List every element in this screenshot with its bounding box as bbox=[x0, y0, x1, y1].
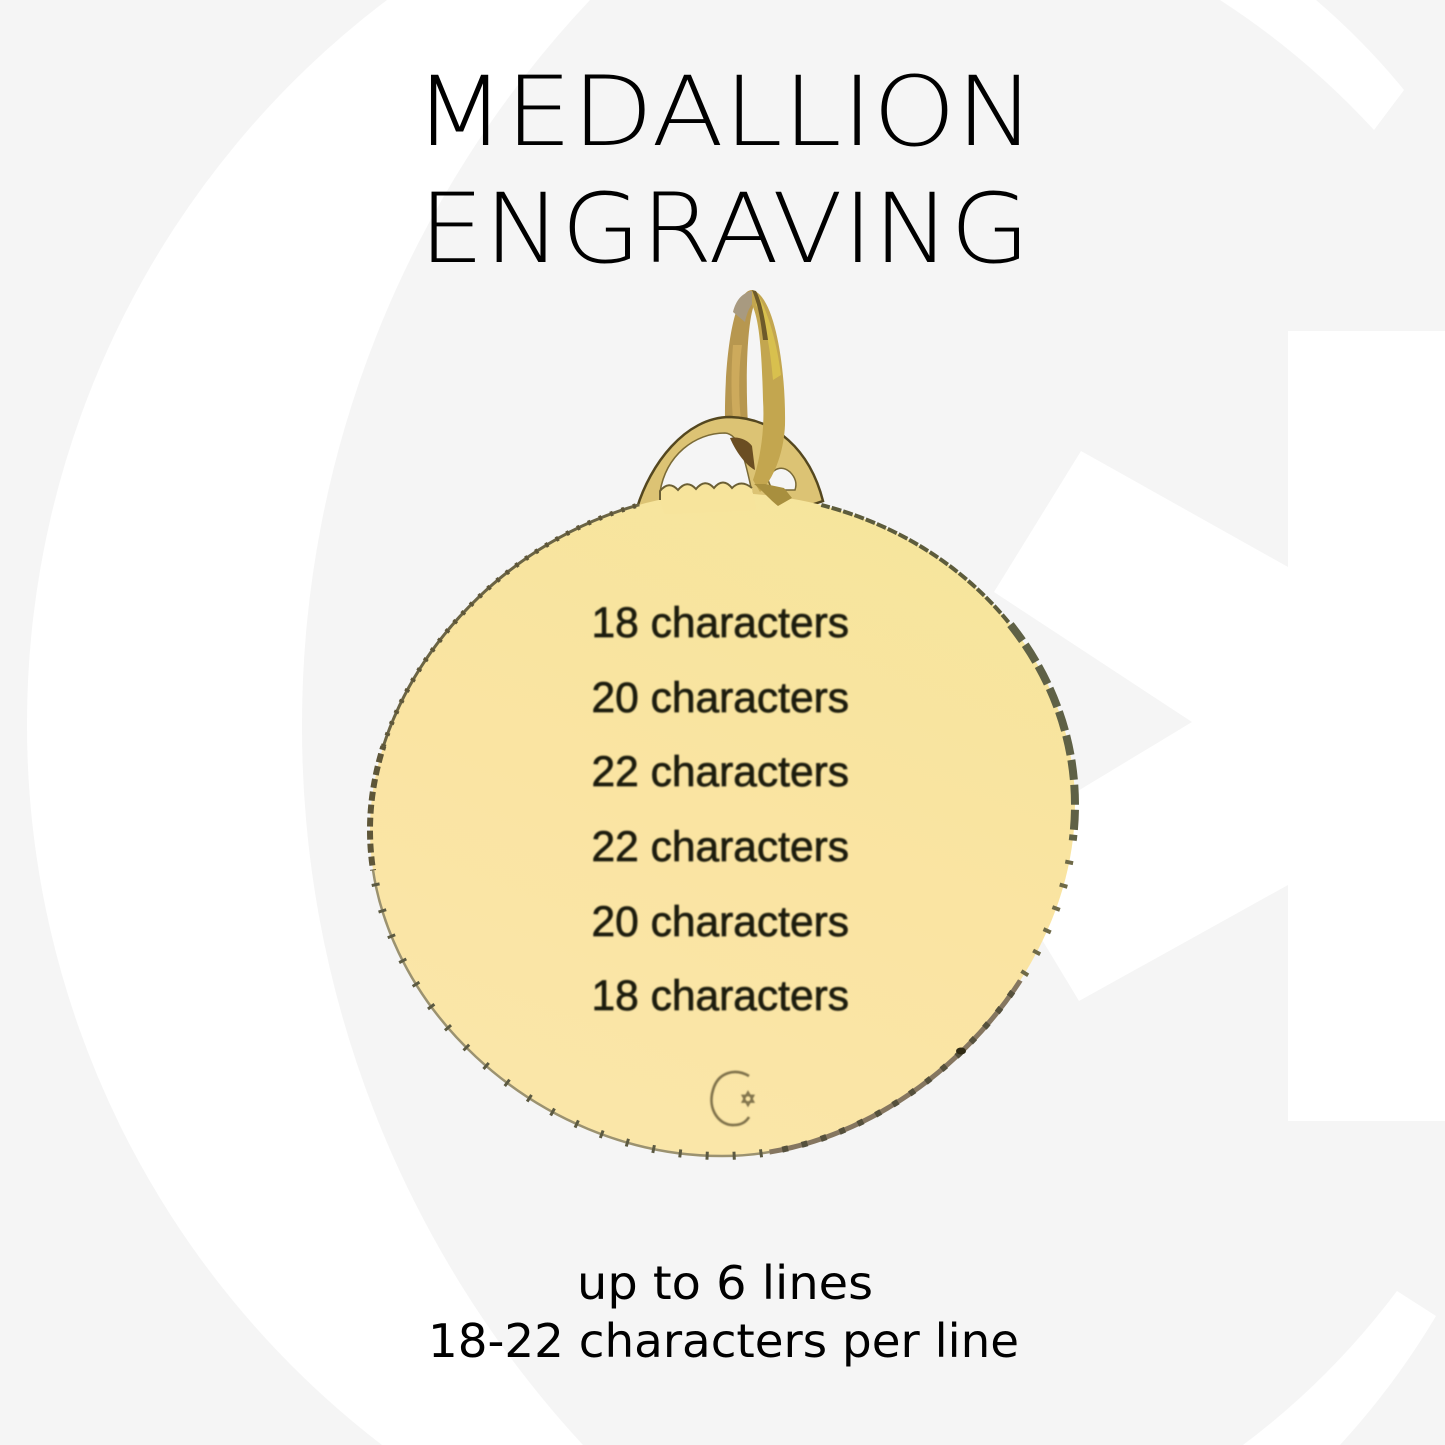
ring: front strand bbox=[752, 290, 792, 506]
engraved text lines bbox=[592, 600, 849, 1020]
caption line 2: 18-22 characters per line bbox=[428, 1314, 1019, 1368]
engraved line 2: 20 characters bbox=[592, 675, 849, 722]
watermark: C upper terminal bbox=[1220, 0, 1404, 130]
icon: maker's mark crescent and star bbox=[711, 1072, 754, 1125]
title line 1: MEDALLION bbox=[414, 56, 1035, 168]
title line 2: ENGRAVING bbox=[419, 173, 1030, 285]
ring: back strand bbox=[725, 290, 754, 425]
medallion pendant bbox=[370, 290, 1075, 1156]
engraved line 4: 22 characters bbox=[592, 824, 849, 871]
edge: lower right ticks bbox=[1020, 840, 1077, 977]
engraved line 6: 18 characters bbox=[592, 973, 849, 1020]
watermark: E arrow bbox=[994, 451, 1288, 1001]
edge: right thick scallops bbox=[1007, 622, 1079, 840]
edge: upper left outline bbox=[381, 503, 640, 747]
star bbox=[742, 1092, 754, 1106]
edge: top right outline bbox=[820, 503, 1010, 624]
engraved line 3: 22 characters bbox=[592, 749, 849, 796]
dark nick on lower right edge bbox=[956, 1048, 966, 1054]
engraved line 1: 18 characters bbox=[592, 600, 849, 647]
edge: bottom right outline bbox=[769, 979, 1022, 1154]
edge: lower left ticks bbox=[372, 870, 770, 1160]
caption bbox=[428, 1256, 1019, 1368]
watermark: C lower terminal bbox=[1243, 1291, 1436, 1445]
title bbox=[414, 56, 1035, 285]
edge: left dark band bbox=[367, 746, 386, 871]
medallion disc bbox=[370, 493, 1075, 1156]
watermark: E bar bbox=[1288, 331, 1445, 1121]
crescent bbox=[711, 1072, 749, 1125]
watermark: C crescent bbox=[27, 0, 590, 1445]
disc fill bbox=[370, 493, 1075, 1156]
scallop outline bbox=[660, 482, 752, 500]
small scallops under bail bbox=[660, 482, 756, 514]
engraved line 5: 20 characters bbox=[592, 899, 849, 946]
bail arch bbox=[637, 417, 823, 512]
caption line 1: up to 6 lines bbox=[577, 1256, 873, 1310]
